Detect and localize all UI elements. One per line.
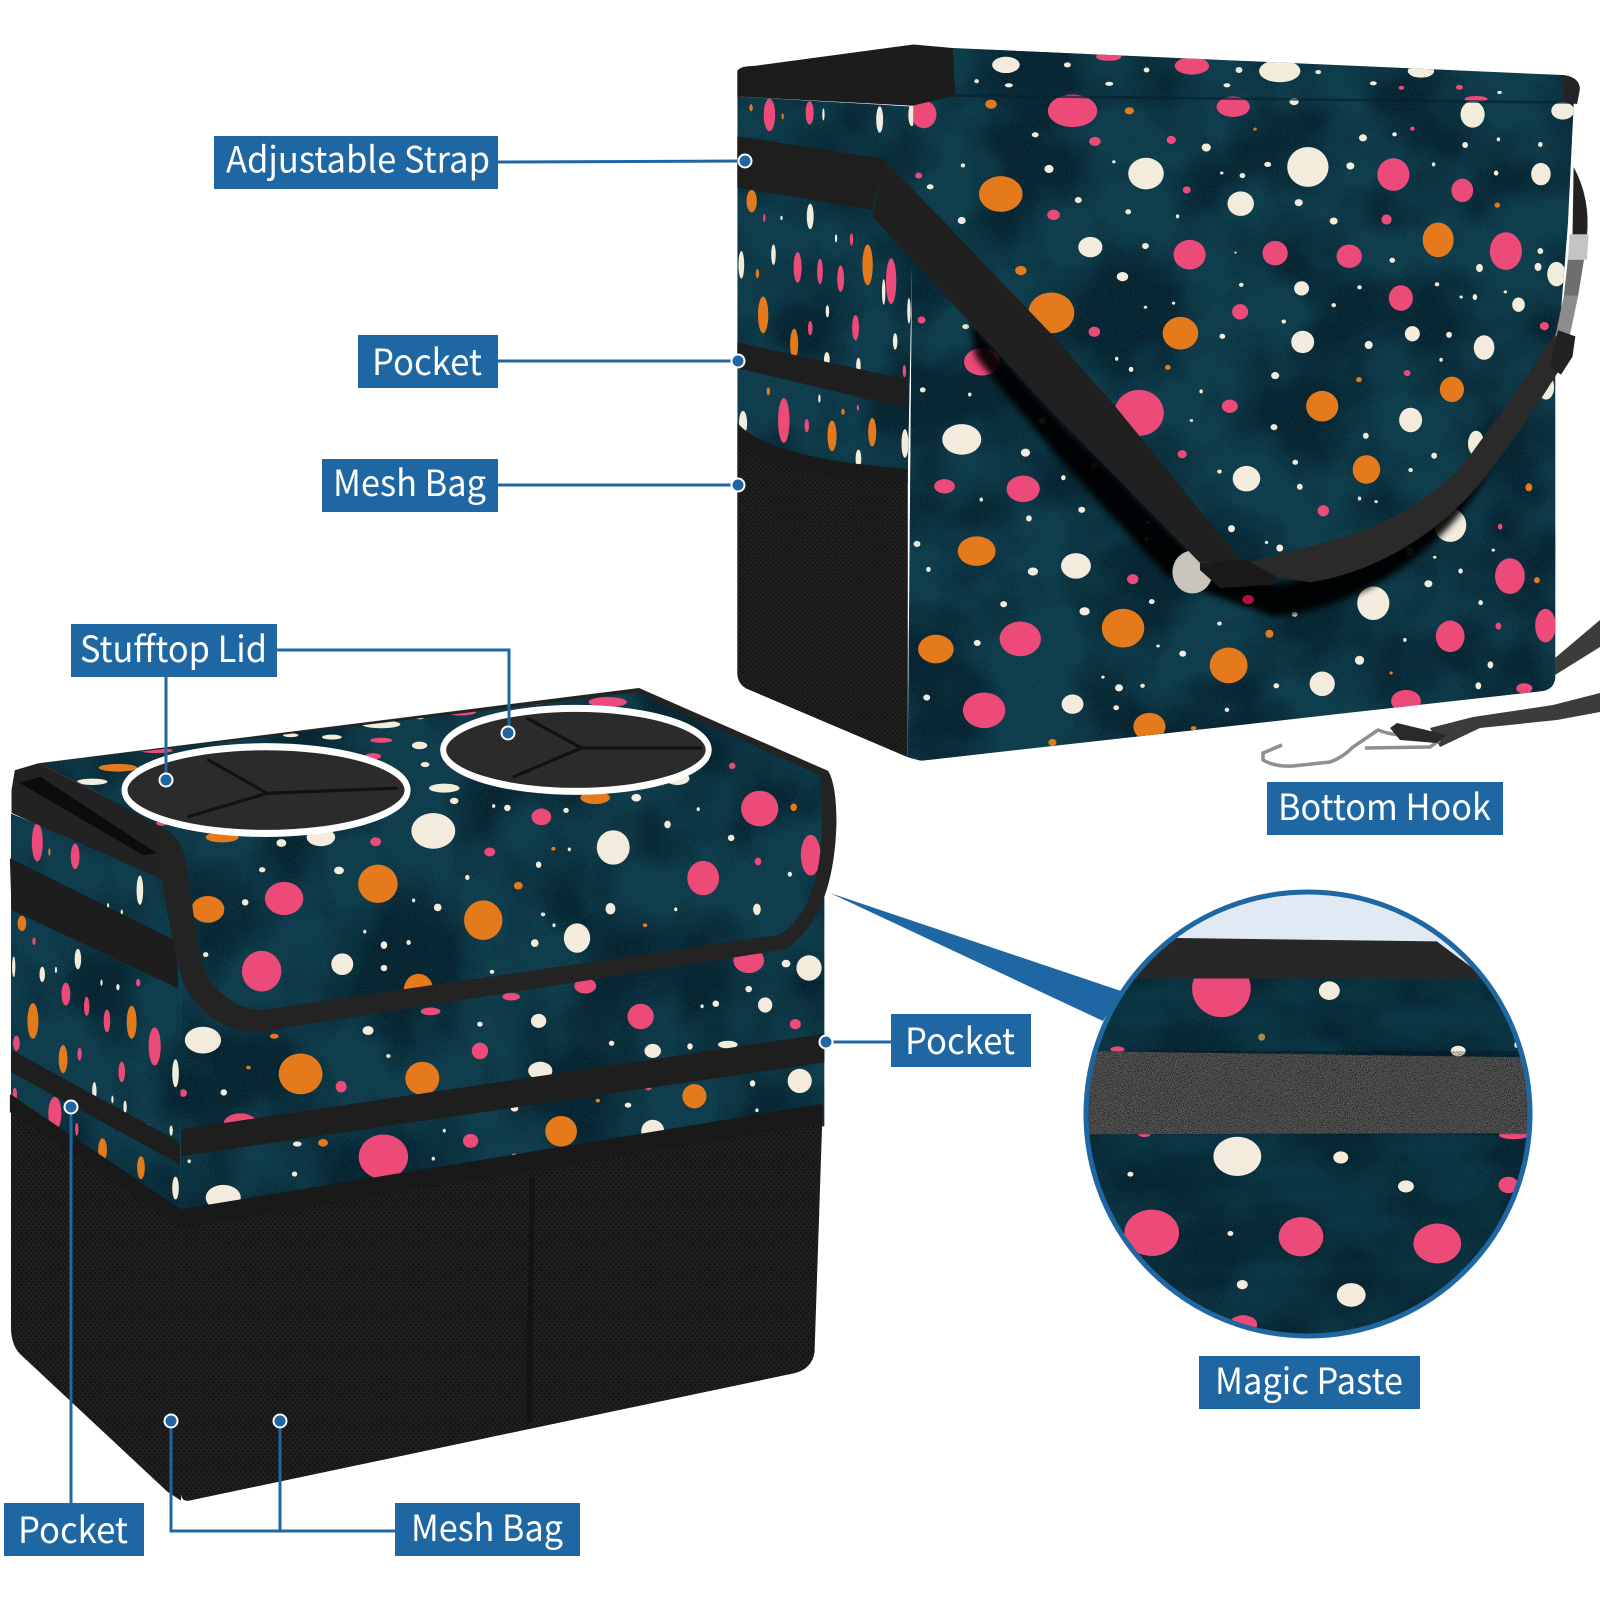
- silver clip on right edge: [1550, 167, 1589, 375]
- hook strap upper: [1555, 620, 1600, 675]
- trim cavity: [20, 777, 157, 855]
- side fabric: [8, 810, 184, 1215]
- side strap: [737, 136, 884, 210]
- label: Pocket lower left: [4, 1100, 144, 1556]
- side strap: [10, 858, 178, 988]
- diagonal shoulder strap: [872, 159, 1240, 563]
- bottom hook and strap: [1263, 693, 1600, 766]
- label: Stufftop Lid: Stufftop Lid: [80, 621, 267, 673]
- label: Pocket upper: Pocket: [372, 334, 482, 386]
- mesh bag side: [11, 1094, 181, 1501]
- front face fabric: [907, 46, 1584, 765]
- lid edge seam: [953, 96, 1575, 103]
- lid opening left: [125, 747, 408, 833]
- top binding: [1128, 938, 1487, 979]
- label: Magic Paste: Magic Paste: [1215, 1353, 1403, 1405]
- lid flap border: [38, 688, 836, 1032]
- label: Pocket right: [820, 1013, 1031, 1067]
- label: Pocket upper: [358, 334, 744, 388]
- dots over shadow: [1172, 551, 1254, 604]
- mesh bag front: [181, 1106, 823, 1501]
- side pocket band: [11, 1050, 180, 1164]
- top lid corner trim: [737, 44, 955, 106]
- label: Pocket right: Pocket: [905, 1013, 1015, 1065]
- lid opening right: [443, 708, 709, 791]
- side pocket band: [737, 342, 908, 409]
- mesh divider: [527, 1177, 535, 1423]
- strap buckle: [1200, 560, 1277, 588]
- label: Adjustable Strap: Adjustable Strap: [226, 132, 490, 184]
- label: Bottom Hook: Bottom Hook: [1278, 779, 1491, 831]
- front pocket band: [181, 1034, 824, 1156]
- label: Stufftop Lid: [71, 621, 514, 786]
- product: organizer back view: [734, 44, 1589, 765]
- label: Mesh Bag lower: Mesh Bag: [411, 1500, 563, 1552]
- mesh pocket band: [737, 423, 908, 483]
- strap shadow: [970, 321, 1495, 617]
- polka dots: [911, 53, 1574, 746]
- label: Adjustable Strap: [214, 132, 752, 189]
- velcro strip: [1089, 1051, 1531, 1134]
- lid fabric: [41, 689, 828, 1027]
- side top trim: [12, 763, 176, 880]
- side panel fabric: [734, 91, 918, 474]
- front body fabric: [178, 887, 825, 1215]
- detail dots: [1110, 960, 1529, 1333]
- label: Mesh Bag upper: [322, 455, 744, 512]
- front lid corner cap: [1564, 75, 1580, 104]
- label: Mesh Bag upper: Mesh Bag: [333, 455, 486, 507]
- fabric in detail: [1088, 978, 1526, 1334]
- curved shoulder strap: [1250, 330, 1574, 582]
- mesh bag top band: [10, 1094, 823, 1228]
- label: Pocket lower left: Pocket: [18, 1502, 128, 1554]
- product: organizer front view: [8, 688, 836, 1501]
- callout: magnified detail pointer: [830, 893, 1121, 1021]
- callout: magnified magic paste detail: [1069, 890, 1546, 1342]
- side mesh pocket: [737, 423, 908, 757]
- label: Mesh Bag lower: [164, 1414, 580, 1556]
